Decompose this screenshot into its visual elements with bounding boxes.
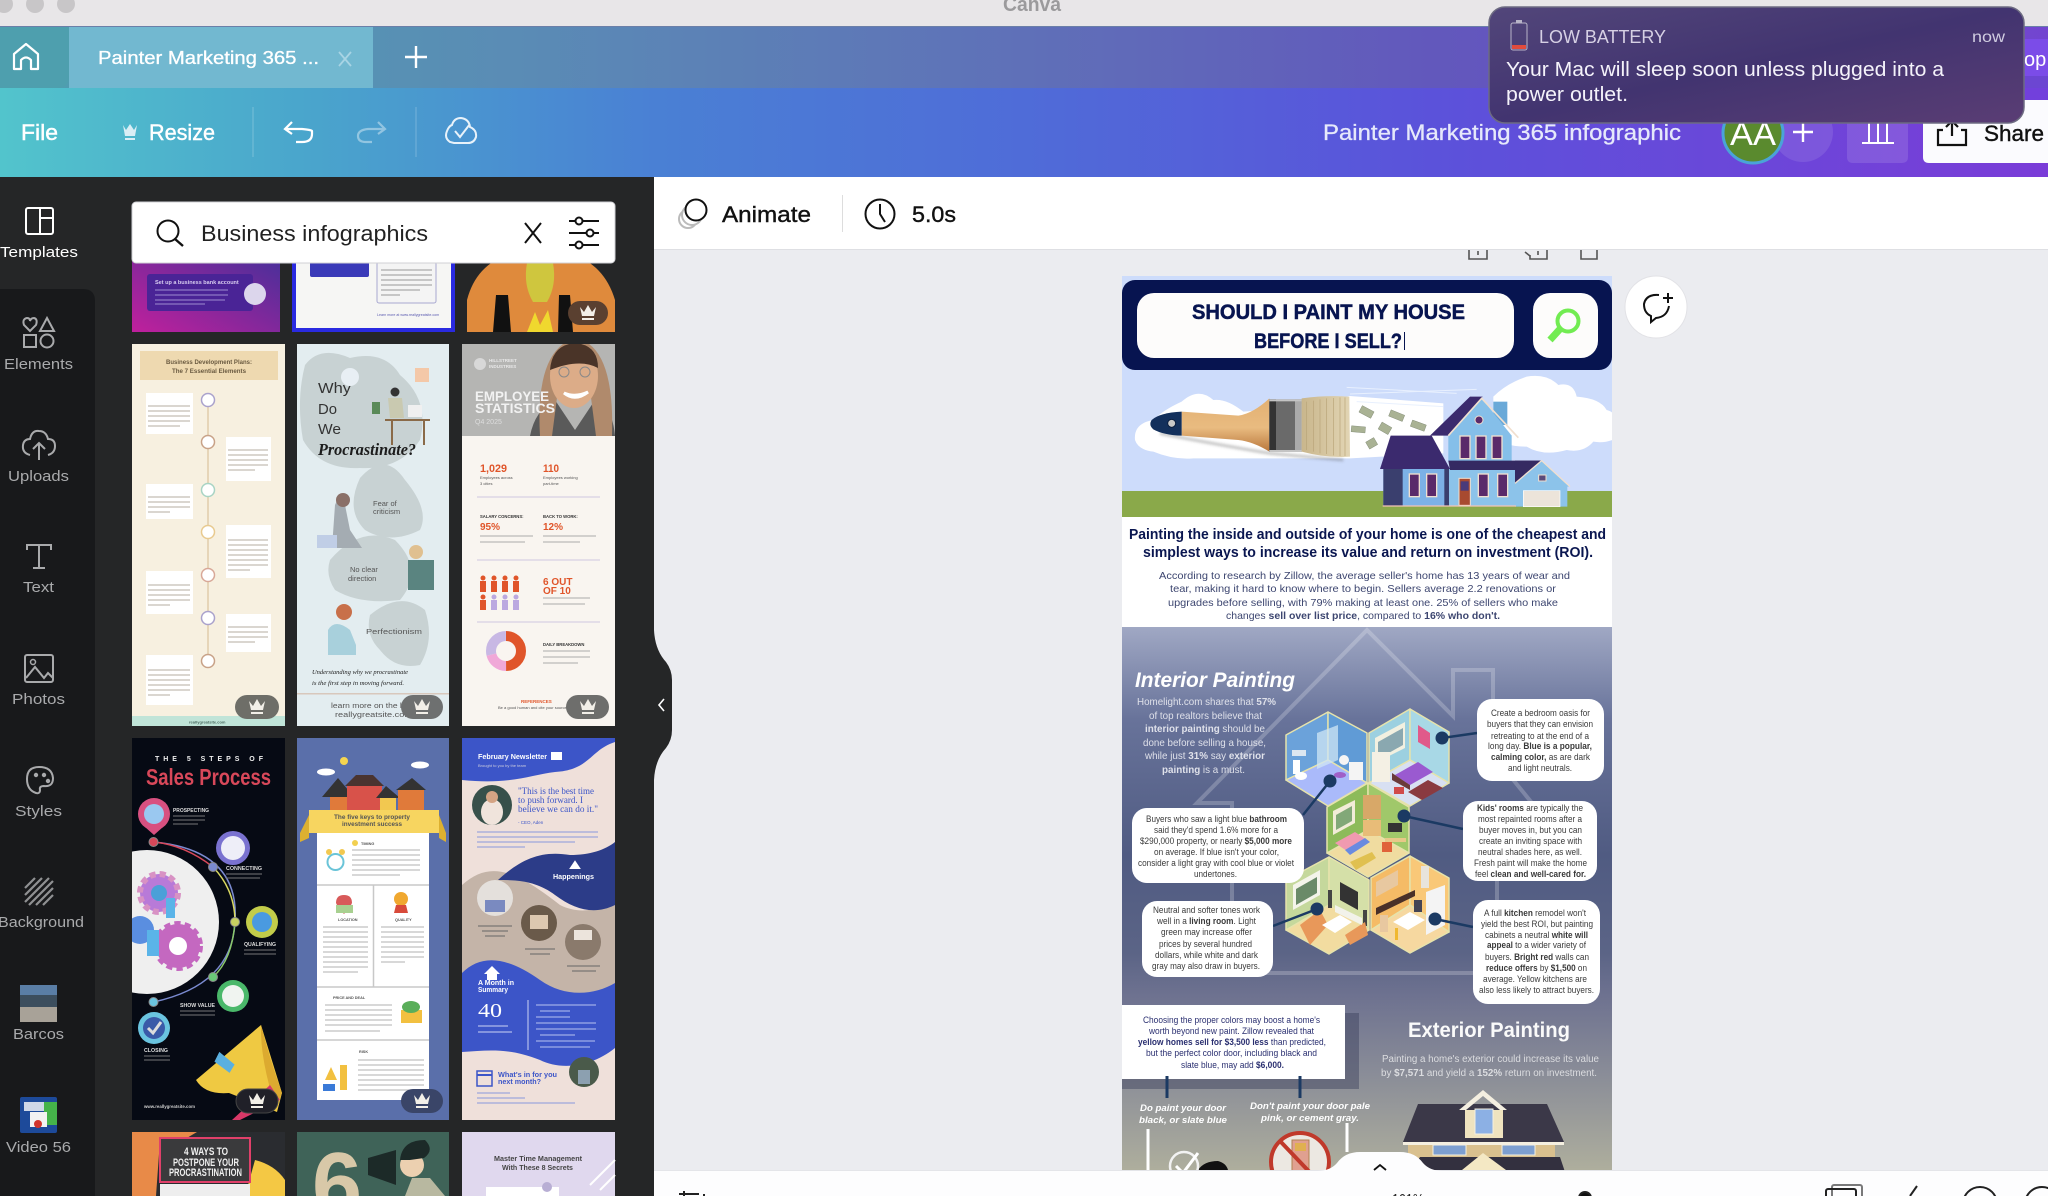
thumbnail: february newsletter: "This is the best time: [518, 786, 594, 796]
thumbnail: february newsletter: - CEO, Aden: [518, 820, 544, 825]
thumbnail: employee statistics: EMPLOYEE: [475, 388, 549, 404]
callout: bathroom: Buyers who saw a light blue bathroom: [1146, 814, 1287, 824]
pages expander tab: [1317, 1152, 1443, 1171]
blue house: [1380, 397, 1570, 507]
left editor panel: [0, 177, 654, 1196]
thumbnail: why do we procrastinate: Fear of: [373, 499, 398, 508]
callout: living room: well in a living room. Light: [1156, 916, 1256, 926]
callout: bedroom: buyers that they can envision: [1487, 719, 1593, 729]
insights button: [1847, 100, 1908, 163]
crown badge: [568, 301, 608, 325]
room: bedroom: [1369, 709, 1449, 806]
top toolbar: [0, 88, 2048, 177]
side rail: [0, 289, 95, 1196]
illustration: brush and house: [1122, 376, 1612, 517]
new tab button: [405, 46, 427, 68]
door colour text box: worth beyond new paint. Zillow revealed that: [1148, 1026, 1314, 1036]
thumbnail: february newsletter: A Month in: [478, 980, 514, 987]
thumbnail: sales process: CONNECTING: [226, 866, 262, 872]
interior intro text: while just 31% say exterior: [1144, 750, 1265, 762]
search box: Business infographics: [201, 221, 428, 246]
intro text block: [1122, 517, 1612, 627]
thumbnail row 0: bank account: [132, 250, 280, 332]
nav: background: Background: [0, 914, 84, 931]
panel collapse handle: [654, 630, 672, 780]
callout: kitchen: A full kitchen remodel won't: [1484, 908, 1586, 918]
thumbnail: business development plans: Business Development Plans:: [166, 360, 252, 366]
callout: kitchen: also less likely to attract buyers.: [1479, 985, 1594, 995]
megaphone: [196, 1025, 282, 1120]
nav: video 56: [6, 1097, 71, 1156]
door colour text box: slate blue, may add $6,000.: [1181, 1060, 1284, 1070]
thumbnail: employee statistics: Employees working: [543, 475, 578, 480]
callout: kitchen: [1473, 900, 1600, 1004]
thumbnail: employee statistics: BACK TO WORK:: [543, 514, 578, 519]
thumbnail: employee statistics: REFERENCES: [521, 699, 552, 704]
file menu: File: [21, 120, 58, 145]
callout: kids rooms: neutral shades here, as well.: [1478, 847, 1582, 857]
don't paint label: [1250, 1101, 1371, 1124]
avatar: AA: [1730, 115, 1776, 152]
callout: kids rooms: buyer moves in, but you can: [1479, 825, 1582, 835]
thumbnail: property investment: RISK: [359, 1050, 368, 1054]
thumbnail: employee statistics: INDUSTRIES: [489, 364, 516, 369]
animate button: [679, 200, 811, 228]
thumbnail: property investment: TIMING: [361, 842, 374, 846]
interior intro text: [1137, 696, 1277, 776]
low battery notification: [1489, 7, 2024, 123]
callout: kitchen: yield the best ROI, but painting: [1481, 919, 1593, 929]
connector dots: [1310, 732, 1448, 926]
callout: bedroom: retreating to at the end of a: [1491, 731, 1589, 741]
thumbnail: february newsletter: believe we can do it.": [518, 804, 598, 814]
callout: kids rooms: Fresh paint will make the home: [1474, 858, 1587, 868]
duration: [866, 200, 956, 228]
callout: bedroom: Create a bedroom oasis for: [1491, 708, 1590, 718]
section: door colours: [1122, 1005, 1370, 1170]
callout: living room: dollars, while white and dark: [1155, 950, 1258, 960]
do paint label: black, or slate blue: [1139, 1115, 1228, 1126]
thumbnail: sales process: PROSPECTING: [173, 808, 209, 814]
title: [1137, 293, 1514, 358]
interior intro text: Homelight.com shares that 57%: [1137, 696, 1277, 708]
intro text block: Painting the inside and outside of your home is one of the cheapest and: [1129, 527, 1606, 543]
avatar: [1723, 103, 1783, 163]
thumbnail: why do we procrastinate: Do: [318, 401, 337, 418]
paint brush: [1150, 396, 1350, 460]
section: interior painting: [1132, 669, 1604, 1004]
thumbnail: 4 ways to postpone: 4 WAYS TO: [184, 1146, 228, 1158]
nav: templates: Templates: [0, 244, 78, 261]
clear icon: [525, 223, 541, 243]
white box shadow: [1122, 1013, 1359, 1089]
duration: 5.0s: [912, 202, 956, 227]
thumbnail row 0: bank account: Set up a business bank account: [155, 280, 239, 286]
exterior house: [1403, 1090, 1565, 1172]
callout: kitchen: average. Yellow kitchens are: [1483, 974, 1587, 984]
thumbnail: time management: [462, 1132, 615, 1196]
interior intro text: interior painting should be: [1145, 723, 1265, 735]
callout: living room: green may increase offer: [1161, 927, 1252, 937]
thumbnail: sales process: THE 5 STEPS OF: [155, 756, 264, 763]
do paint label: Do paint your door: [1140, 1103, 1227, 1114]
sky: [1122, 276, 1612, 491]
do paint label: [1139, 1103, 1228, 1126]
exterior text: [1381, 1054, 1599, 1079]
crown badge: [401, 1089, 443, 1113]
don't paint label: Don't paint your door pale: [1250, 1101, 1371, 1112]
home tab: [0, 27, 69, 88]
callout: bedroom: long day. Blue is a popular,: [1488, 741, 1592, 751]
nav: styles: [15, 767, 62, 820]
thumbnail: employee statistics: DAILY BREAKDOWN: [543, 642, 584, 647]
nav: uploads: Uploads: [8, 468, 69, 485]
section: exterior painting: [1381, 1019, 1599, 1172]
callout: bedroom: calming color, as are dark: [1491, 752, 1590, 762]
thumbnail: employee statistics: [462, 338, 615, 726]
thumbnail: employee statistics: 12%: [543, 522, 563, 533]
thumbnail: why do we procrastinate: Procrastinate?: [317, 440, 416, 459]
bottom icons: [679, 1185, 2048, 1196]
room: living room: [1286, 857, 1369, 954]
thumbnail: february newsletter: next month?: [498, 1079, 541, 1086]
interior intro text: of top realtors believe that: [1149, 710, 1262, 722]
thumbnail: sales process: SHOW VALUE: [180, 1003, 216, 1009]
redo: [358, 122, 385, 142]
thumbnail: why do we procrastinate: No clear: [350, 565, 378, 574]
template thumbnails: [75, 250, 615, 1196]
app button behind notification: op: [2024, 49, 2046, 71]
thumbnail: employee statistics: Employees across: [480, 475, 513, 480]
nav: barcos: [13, 985, 64, 1043]
thumbnail: sales process: Sales Process: [146, 764, 271, 790]
callout: kids rooms: [1463, 801, 1597, 881]
intro text block: changes sell over list price, compared to 16% who don't.: [1226, 610, 1500, 622]
thumbnail: sales process: QUALIFYING: [244, 942, 276, 948]
door colour text box: yellow homes sell for $3,500 less than predicted,: [1138, 1037, 1326, 1047]
nav: elements: Elements: [4, 356, 73, 373]
thumbnail: february newsletter: Happenings: [553, 874, 594, 881]
thumbnail: february newsletter: February Newsletter: [478, 754, 547, 761]
door colour text box: but the perfect color door, including black and: [1146, 1048, 1317, 1058]
animate button: Animate: [722, 202, 811, 227]
thumbnail: why do we procrastinate: Understanding why we procrastinate: [312, 669, 408, 676]
filter icon: [569, 218, 599, 248]
callout: bathroom: [1132, 808, 1304, 883]
nav: styles: Styles: [15, 803, 62, 820]
callout: kitchen: appeal to a wider variety of: [1487, 940, 1586, 950]
callout: kitchen: cabinets a neutral white will: [1485, 930, 1588, 940]
low battery notification: now: [1972, 29, 2005, 46]
crown badge: [235, 695, 279, 719]
thumbnail: property investment: [297, 738, 449, 1120]
callout: bedroom: and light neutrals.: [1508, 763, 1572, 773]
thumbnail: why do we procrastinate: Perfectionism: [366, 627, 422, 636]
title: BEFORE I SELL?: [1254, 330, 1402, 353]
door colour text box: [1122, 1005, 1345, 1079]
thumbnail: employee statistics: Be a good human and cite your sources!: [498, 705, 570, 710]
paint streaks: [1347, 387, 1477, 407]
resize menu: Resize: [149, 120, 215, 145]
grass: [1122, 491, 1612, 517]
callout: bathroom: on average. If blue isn't your color,: [1154, 847, 1279, 857]
crown badge: [401, 695, 443, 719]
thumbnail: why do we procrastinate: Why: [318, 380, 352, 397]
thumbnail: why do we procrastinate: criticism: [373, 507, 400, 516]
thumbnail: employee statistics: SALARY CONCERNS:: [480, 514, 524, 519]
thumbnail: why do we procrastinate: reallygreatsite.com: [335, 712, 412, 719]
document title: Painter Marketing 365 infographic: [1323, 120, 1681, 145]
bottom status bar: [654, 1152, 2048, 1196]
thumbnail: february newsletter: to push forward. I: [518, 795, 583, 805]
thumbnail: february newsletter: [462, 738, 615, 1120]
battery icon: [1511, 20, 1527, 50]
thumbnail: employee statistics: STATISTICS: [475, 400, 555, 416]
thumbnail: february newsletter: Summary: [478, 987, 508, 994]
interior intro text: painting is a must.: [1162, 764, 1245, 776]
thumbnail: february newsletter: What's in for you: [498, 1072, 557, 1079]
thumbnail: property investment: LOCATION: [338, 918, 358, 922]
pins: [138, 798, 278, 1044]
thumbnail: employee statistics: part-time: [543, 481, 560, 486]
header bar: [1122, 280, 1612, 370]
exterior heading: Exterior Painting: [1408, 1019, 1570, 1042]
callout: kids rooms: feel clean and well-cared for.: [1475, 869, 1586, 879]
interior intro text: done before selling a house,: [1143, 737, 1266, 749]
nav: photos: [12, 655, 65, 708]
callout: kids rooms: Kids' rooms are typically the: [1477, 803, 1583, 813]
thumbnail: february newsletter: Brought to you by the team: [478, 763, 527, 768]
thumbnail: why do we procrastinate: learn more on the blog: [331, 703, 416, 710]
thumbnail: business development plans: [132, 344, 285, 726]
cloud saved icon: [446, 118, 476, 143]
intro text block: According to research by Zillow, the average seller's home has 13 years of wear and: [1159, 570, 1570, 582]
thumbnail: business development plans: reallygreatsite.com: [189, 720, 226, 724]
nav: uploads: [8, 431, 69, 485]
callout: bathroom: $290,000 property, or nearly $5,000 more: [1140, 836, 1292, 846]
don't paint label: pink, or cement gray.: [1260, 1113, 1359, 1124]
interior heading: Interior Painting: [1135, 669, 1295, 692]
thumbnail row 0: blue frame: Learn more at www.reallygreatsite.com: [377, 313, 439, 317]
thumbnail: employee statistics: HILLSTREET: [489, 358, 517, 363]
callout: bedroom: [1477, 699, 1604, 781]
share button: [1923, 100, 2048, 163]
search box: [132, 202, 615, 263]
thumbnail: employee statistics: 3 cities: [480, 481, 492, 486]
room: kids room: [1327, 783, 1409, 877]
callout: kids rooms: most repainted rooms after a: [1478, 814, 1582, 824]
door colour text box: Choosing the proper colors may boost a home's: [1143, 1015, 1320, 1025]
app button behind notification: [2024, 39, 2048, 100]
thumbnail: property investment: PRICE AND DEAL: [333, 996, 366, 1000]
crown badge: [566, 695, 609, 719]
callout: bathroom: said they'd spend 1.6% more for a: [1154, 825, 1278, 835]
intro text block: upgrades before selling, with 79% making at least one. 25% of sellers who make: [1168, 597, 1558, 609]
share button: Share: [1984, 121, 2044, 146]
page toolbar icons: [1469, 250, 1597, 259]
thumbnail: employee statistics: OF 10: [543, 586, 571, 597]
callout: kids rooms: create an inviting space with: [1479, 836, 1582, 846]
exterior text: Painting a home's exterior could increase its value: [1382, 1054, 1599, 1065]
thumbnail row 0: blue frame: [292, 250, 455, 332]
exterior text: by $7,571 and yield a 152% return on investment.: [1381, 1068, 1597, 1079]
callout: living room: [1142, 901, 1273, 977]
thumbnail: sales process: www.reallygreatsite.com: [143, 1104, 195, 1109]
thumbnail: why do we procrastinate: [297, 344, 449, 726]
money bills: [1351, 406, 1426, 449]
nav: background: [0, 878, 84, 931]
thumbnail: 4 ways to postpone: POSTPONE YOUR: [173, 1157, 239, 1169]
add collaborator button: [1773, 102, 1833, 162]
thumbnail: property investment: QUALITY: [395, 918, 412, 922]
check door icon: [1170, 1152, 1228, 1180]
callout: kitchen: buyers. Bright red walls can: [1485, 952, 1589, 962]
intro text block: tear, making it hard to know where to begin. Sellers average 2.2 renovations or: [1170, 583, 1557, 595]
house outline watermark: [1197, 630, 1532, 973]
thumbnail: why do we procrastinate: direction: [348, 574, 376, 583]
mac title bar: [0, 0, 2048, 26]
add comment button: [1625, 276, 1687, 338]
thumbnail: employee statistics: 6 OUT: [543, 577, 572, 588]
houses: [322, 775, 426, 810]
connector lines: [1273, 733, 1477, 927]
low battery notification: power outlet.: [1506, 84, 1628, 106]
thumbnail: employee statistics: 1,029: [480, 463, 507, 475]
infographic page: [1122, 276, 1612, 1191]
thumbnail: time management: Master Time Management: [494, 1154, 582, 1163]
room: kitchen: [1371, 856, 1449, 953]
title: SHOULD I PAINT MY HOUSE: [1192, 301, 1465, 324]
callout: kitchen: reduce offers by $1,500 on: [1486, 963, 1587, 973]
thumbnail row 0: orange lightbulb: [467, 250, 615, 332]
thumbnail: sales process: CLOSING: [144, 1048, 168, 1054]
thumbnail: sales process: [132, 738, 285, 1120]
undo: [285, 122, 312, 142]
interior and exterior gradient panel: [1122, 627, 1612, 1170]
callout: bathroom: undertones.: [1194, 869, 1237, 879]
active tab: [69, 27, 373, 88]
intro text block: simplest ways to increase its value and return on investment (ROI).: [1143, 545, 1593, 561]
nav: elements: [4, 318, 73, 373]
thumbnail: employee statistics: 95%: [480, 522, 500, 533]
low battery notification: Your Mac will sleep soon unless plugged into a: [1506, 59, 1945, 81]
thumbnail: time management: With These 8 Secrets: [502, 1163, 573, 1172]
thumbnail: february newsletter: 40: [478, 1000, 502, 1022]
thumbnail: employee statistics: Q4 2025: [475, 419, 502, 426]
browser tab bar: [0, 26, 2048, 88]
nav: photos: Photos: [12, 691, 65, 708]
nav: barcos: Barcos: [13, 1026, 64, 1043]
nav: text: [23, 545, 55, 596]
thumbnail: 4 ways to postpone: PROCRASTINATION: [169, 1167, 242, 1179]
thumbnail: employee statistics: 110: [543, 463, 559, 475]
nav: text: Text: [23, 579, 55, 596]
thumbnail: property investment: investment success: [342, 821, 402, 828]
thumbnail: property investment: The five keys to property: [334, 814, 410, 821]
nav: templates: [0, 208, 78, 261]
magnifier icon: [1533, 293, 1598, 358]
thumbnail: why do we procrastinate: is the first step in moving forward.: [312, 680, 404, 687]
prohibited door icon: [1271, 1133, 1329, 1191]
thumbnail: business development plans: The 7 Essential Elements: [172, 369, 247, 375]
active tab: Painter Marketing 365 ...: [98, 48, 319, 68]
thumbnail: 4 ways to postpone: [132, 1132, 285, 1196]
isometric rooms: [1286, 709, 1449, 954]
callout: living room: prices by several hundred: [1159, 939, 1252, 949]
clouds: [1135, 376, 1612, 459]
callout: bathroom: consider a light gray with cool blue or violet: [1138, 858, 1294, 868]
callout: living room: Neutral and softer tones work: [1153, 905, 1260, 915]
low battery notification: LOW BATTERY: [1539, 27, 1666, 47]
room: bathroom: [1286, 712, 1367, 806]
thumbnail: teal megaphone: [297, 1132, 449, 1196]
animate and duration toolbar: [654, 177, 2048, 250]
thumbnail: why do we procrastinate: We: [318, 421, 341, 438]
crown badge: [236, 1089, 278, 1113]
search icon: [158, 220, 183, 246]
callout: living room: gray may also draw in buyers.: [1152, 961, 1260, 971]
nav: video 56: Video 56: [6, 1139, 71, 1156]
